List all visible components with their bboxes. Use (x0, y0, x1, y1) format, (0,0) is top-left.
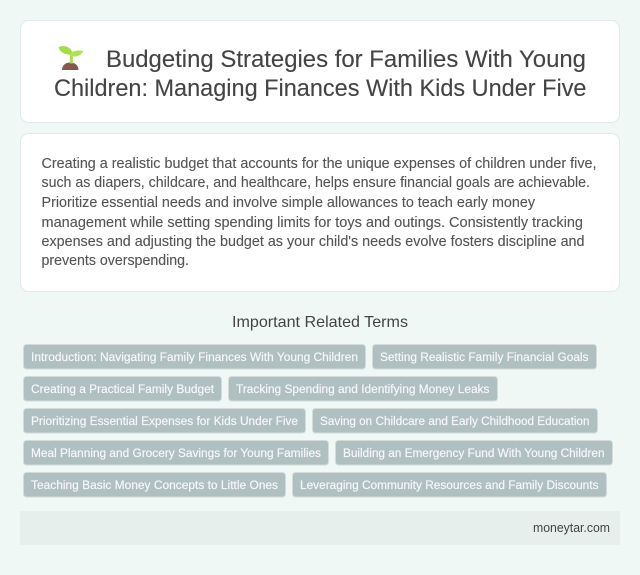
panel: summary text: expenses and adjusting the budget as your child's needs evolve fosters discipline and (42, 234, 584, 250)
icon: seedling (58, 46, 84, 70)
tag: introduction (24, 344, 366, 369)
tag: emergency fund (336, 440, 612, 465)
panel: title card (20, 20, 620, 122)
panel: summary text: Prioritize essential needs and involve simple allowances to teach early money (42, 195, 536, 211)
tag: money concepts (24, 472, 286, 497)
tag: essential expenses: Prioritizing Essential Expenses for Kids Under Five (31, 414, 298, 428)
title: Children: Managing Finances With Kids Under Five (54, 75, 586, 102)
title: Budgeting Strategies for Families With Young (106, 46, 586, 73)
tag: money concepts: Teaching Basic Money Concepts to Little Ones (31, 478, 278, 492)
tag: introduction: Introduction: Navigating Family Finances With Young Children (31, 350, 358, 364)
tag: childcare savings (312, 408, 598, 433)
title (54, 46, 586, 102)
tag: practical budget: Creating a Practical Family Budget (31, 382, 215, 396)
tag: financial goals: Setting Realistic Family Financial Goals (380, 350, 588, 364)
tag list (24, 344, 612, 497)
tag: essential expenses (24, 408, 306, 433)
panel: summary text: Creating a realistic budget that accounts for the unique expenses of children under five, (42, 156, 596, 172)
tag: meal planning (24, 440, 328, 465)
tag: community resources (292, 472, 606, 497)
panel: summary text: such as diapers, childcare, and healthcare, helps ensure financial goals are achievable. (42, 175, 590, 191)
tag: tracking spending: Tracking Spending and Identifying Money Leaks (236, 382, 490, 396)
panel: summary text: prevents overspending. (42, 253, 189, 269)
tag: childcare savings: Saving on Childcare and Early Childhood Education (320, 414, 590, 428)
footer (20, 511, 620, 545)
heading: important related terms: Important Related Terms (232, 314, 408, 331)
tag: meal planning: Meal Planning and Grocery Savings for Young Families (31, 446, 321, 460)
tag: emergency fund: Building an Emergency Fund With Young Children (343, 446, 605, 460)
panel: summary text: management while setting spending limits for toys and outings. Consistently tracking (42, 215, 583, 231)
footer: moneytar.com (533, 521, 610, 535)
tag: practical budget (24, 376, 222, 401)
tag: community resources: Leveraging Community Resources and Family Discounts (300, 478, 598, 492)
panel: summary text (20, 134, 620, 292)
tag: tracking spending (228, 376, 498, 401)
tag: financial goals (372, 344, 596, 369)
